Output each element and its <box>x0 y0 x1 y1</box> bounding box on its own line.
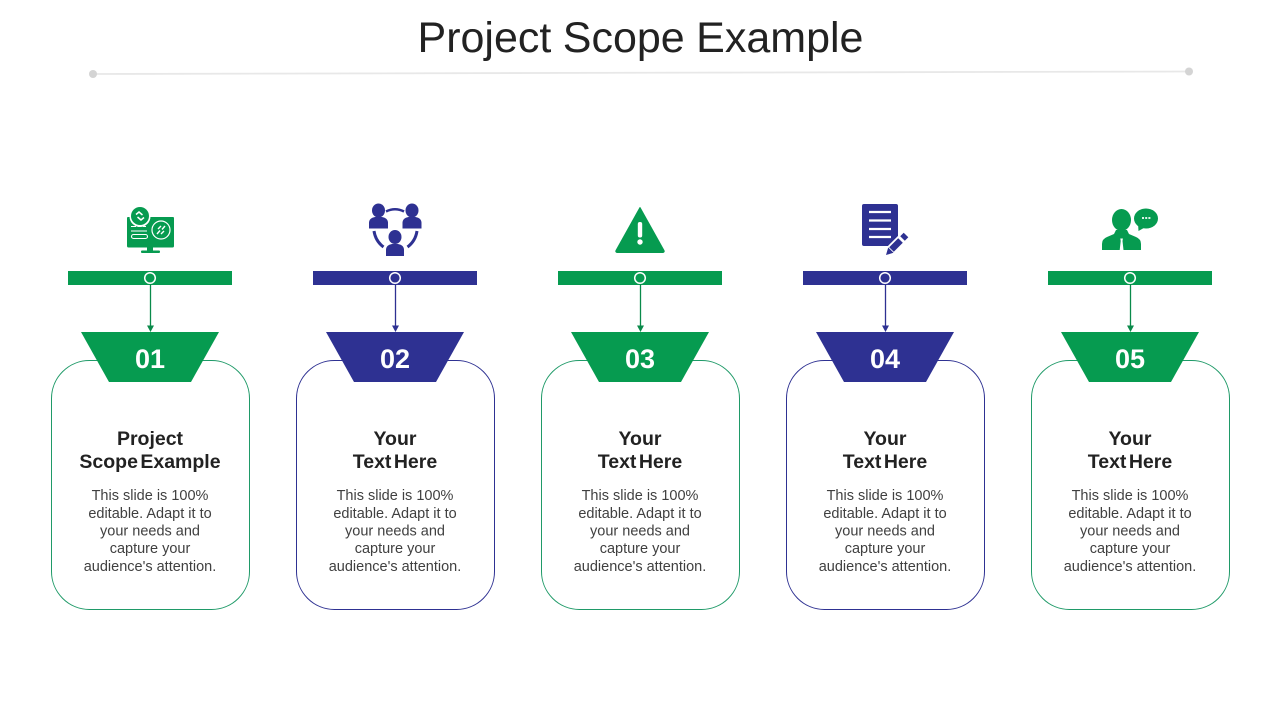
body text: audience's attention. <box>1064 559 1196 575</box>
connector node <box>635 273 645 283</box>
body text: This slide is 100% <box>827 488 944 504</box>
body text: editable. Adapt it to <box>88 506 212 522</box>
heading: Text Here <box>353 451 437 473</box>
number: 04 <box>870 344 900 374</box>
card <box>786 360 984 610</box>
card <box>52 360 250 610</box>
body text: This slide is 100% <box>1072 488 1189 504</box>
body text: capture your <box>600 541 680 557</box>
body text: This slide is 100% <box>582 488 699 504</box>
title divider <box>89 68 1193 78</box>
number badge <box>81 332 219 382</box>
header bar <box>313 271 477 285</box>
body text: your needs and <box>590 524 690 540</box>
connector node <box>145 273 155 283</box>
body text: audience's attention. <box>574 559 706 575</box>
connector node <box>390 273 400 283</box>
number badge <box>816 332 954 382</box>
header bar <box>803 271 967 285</box>
heading: Project <box>117 428 184 450</box>
number: 01 <box>135 344 165 374</box>
number badge <box>326 332 464 382</box>
panel: step 01 <box>52 206 250 610</box>
heading: Your <box>1109 428 1152 450</box>
connector node <box>1125 273 1135 283</box>
icon: monitor with exchange coins <box>127 206 174 253</box>
title: Project Scope Example <box>418 14 863 62</box>
body text: your needs and <box>345 524 445 540</box>
arrow <box>392 284 399 332</box>
body text: This slide is 100% <box>337 488 454 504</box>
number: 05 <box>1115 344 1145 374</box>
heading: Scope Example <box>79 451 221 473</box>
body text: editable. Adapt it to <box>823 506 947 522</box>
heading: Text Here <box>1088 451 1172 473</box>
number badge <box>1061 332 1199 382</box>
body text: editable. Adapt it to <box>1068 506 1192 522</box>
header bar <box>68 271 232 285</box>
heading: Your <box>619 428 662 450</box>
arrow <box>637 284 644 332</box>
heading: Text Here <box>843 451 927 473</box>
header bar <box>1048 271 1212 285</box>
body text: capture your <box>110 541 190 557</box>
panel: step 05 <box>1032 208 1230 610</box>
body text: audience's attention. <box>819 559 951 575</box>
panel: step 02 <box>296 204 494 610</box>
icon: person with speech bubble <box>1102 208 1158 250</box>
number: 02 <box>380 344 410 374</box>
panel: step 03 <box>542 208 740 610</box>
arrow <box>882 284 889 332</box>
body text: editable. Adapt it to <box>333 506 457 522</box>
body text: your needs and <box>1080 524 1180 540</box>
card <box>1032 360 1230 610</box>
panel: step 04 <box>786 204 984 610</box>
body text: capture your <box>845 541 925 557</box>
heading: Your <box>864 428 907 450</box>
arrow <box>1127 284 1134 332</box>
icon: three people in a cycle <box>369 204 422 256</box>
body text: audience's attention. <box>329 559 461 575</box>
body text: This slide is 100% <box>92 488 209 504</box>
body text: capture your <box>1090 541 1170 557</box>
card <box>542 360 740 610</box>
body text: capture your <box>355 541 435 557</box>
body text: editable. Adapt it to <box>578 506 702 522</box>
number badge <box>571 332 709 382</box>
arrow <box>147 284 154 332</box>
connector node <box>880 273 890 283</box>
header bar <box>558 271 722 285</box>
body text: your needs and <box>100 524 200 540</box>
body text: audience's attention. <box>84 559 216 575</box>
card <box>296 360 494 610</box>
heading: Text Here <box>598 451 682 473</box>
number: 03 <box>625 344 655 374</box>
body text: your needs and <box>835 524 935 540</box>
icon: warning triangle <box>616 208 664 253</box>
heading: Your <box>374 428 417 450</box>
icon: document with pencil <box>862 204 906 255</box>
